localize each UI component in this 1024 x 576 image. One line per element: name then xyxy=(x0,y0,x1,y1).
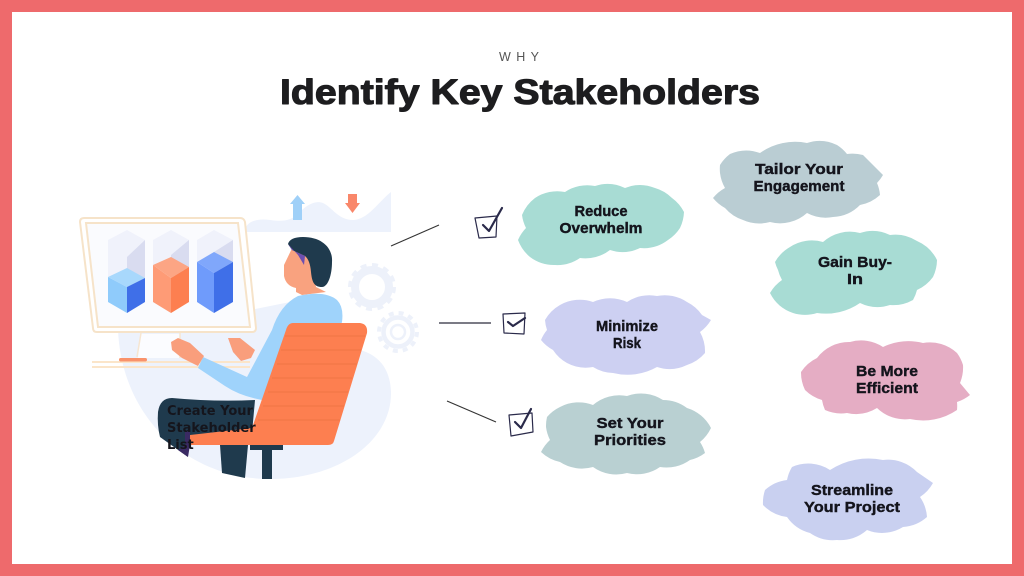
cloud: Gain Buy-In: Gain Buy- xyxy=(818,254,892,271)
cloud: Set Your Priorities: Set Your xyxy=(596,415,664,432)
cloud: Streamline Your Project: Your Project xyxy=(804,499,900,516)
cloud: Minimize Risk: Risk xyxy=(613,335,642,352)
cloud: Tailor Your Engagement xyxy=(713,141,883,223)
title: Identify Key Stakeholders xyxy=(280,73,760,112)
illustration: person at computer xyxy=(80,192,417,479)
connector line 2 xyxy=(439,322,491,324)
chart hill xyxy=(245,192,391,232)
chart: 3D bars xyxy=(108,230,233,313)
eyebrow: WHY: WHY xyxy=(499,50,540,64)
cloud: Reduce Overwhelm xyxy=(518,184,684,265)
cloud: Set Your Priorities: Priorities xyxy=(594,432,666,449)
stray label: Create Your Stakeholder List: Stakeholder xyxy=(167,421,256,436)
icon: down arrow xyxy=(345,194,360,213)
icon: up arrow xyxy=(290,195,305,220)
background blob xyxy=(118,300,391,479)
cloud: Streamline Your Project xyxy=(763,458,933,540)
torso and arm xyxy=(198,294,342,400)
cloud: Tailor Your Engagement: Engagement xyxy=(754,178,845,195)
cloud: Be More Efficient: Be More xyxy=(856,363,918,380)
cloud: Minimize Risk xyxy=(541,295,711,375)
monitor xyxy=(80,218,256,332)
stray label: Create Your Stakeholder List: Create Your xyxy=(167,404,254,419)
near hand xyxy=(171,338,204,366)
hair xyxy=(288,237,332,287)
cloud: Be More Efficient xyxy=(801,340,970,420)
icon: checkbox 1 xyxy=(475,208,502,238)
icon: gears xyxy=(350,265,417,351)
icon: checkbox 2 xyxy=(503,313,525,334)
cloud: Be More Efficient: Efficient xyxy=(856,380,918,397)
cloud: Reduce Overwhelm: Reduce xyxy=(574,203,628,220)
connector line 3 xyxy=(447,401,496,422)
legs xyxy=(158,398,255,457)
monitor stand and desk xyxy=(92,333,250,367)
cloud: Minimize Risk: Minimize xyxy=(596,318,658,335)
far hand xyxy=(228,338,255,361)
chair xyxy=(190,323,367,479)
cloud: Gain Buy-In xyxy=(770,231,937,315)
cloud: Tailor Your Engagement: Tailor Your xyxy=(755,161,843,178)
person xyxy=(158,237,342,478)
cloud: Reduce Overwhelm: Overwhelm xyxy=(560,220,642,237)
neck and face xyxy=(284,240,326,295)
stray label: Create Your Stakeholder List: List xyxy=(167,438,194,453)
shoe xyxy=(178,431,190,457)
cloud: Set Your Priorities xyxy=(541,393,711,474)
connector line 1 xyxy=(391,225,439,246)
cloud: Streamline Your Project: Streamline xyxy=(811,482,893,499)
icon: checkbox 3 xyxy=(509,409,533,436)
cloud: Gain Buy-In: In xyxy=(847,271,863,288)
